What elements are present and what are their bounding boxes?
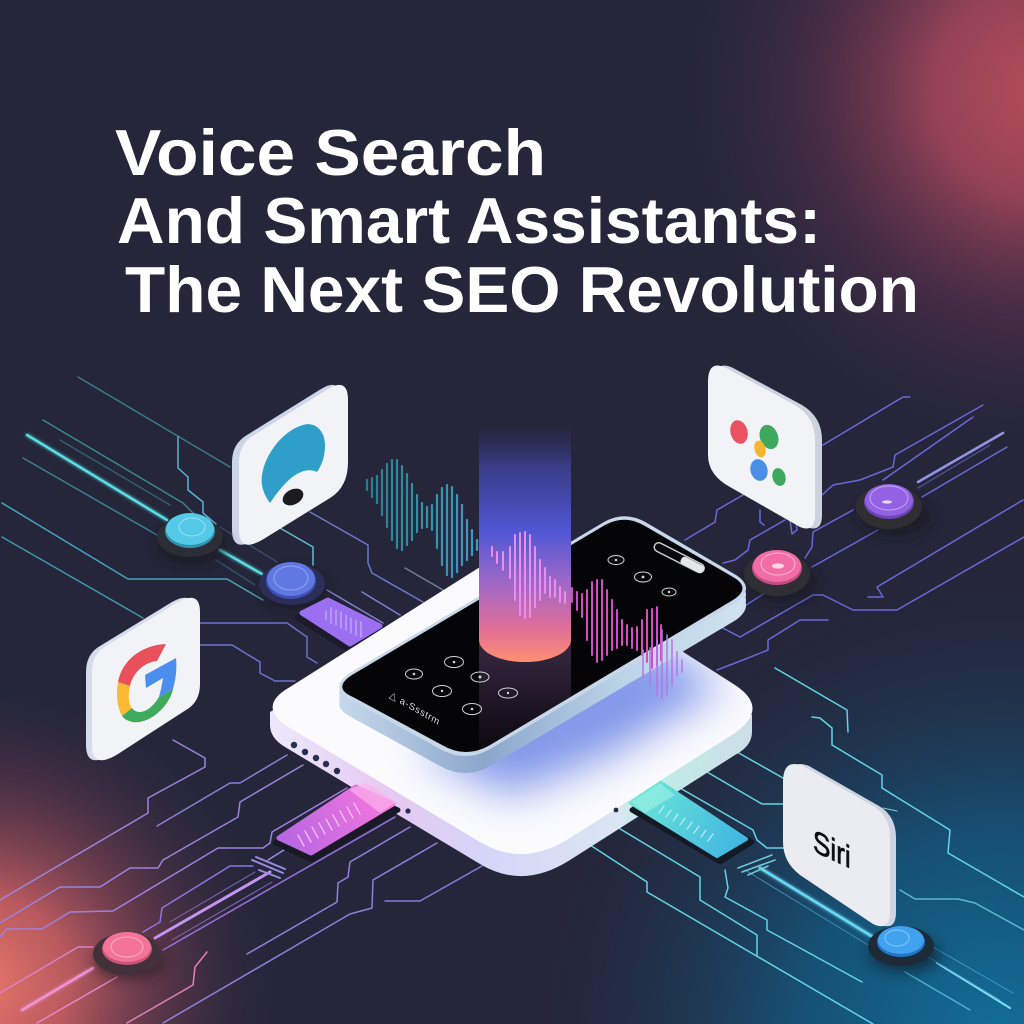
connector: pink chip bbox=[275, 784, 398, 860]
screen icon dots bbox=[413, 559, 670, 710]
card: siri bbox=[783, 764, 896, 926]
icon: google G logo bbox=[117, 644, 176, 722]
pink sound wave bbox=[492, 532, 682, 698]
light beam bbox=[479, 425, 571, 662]
platform side bbox=[270, 700, 752, 876]
icon: blue dome bbox=[262, 424, 325, 503]
circuit lines: lower left bbox=[0, 740, 482, 1023]
circuit lines: upper left bbox=[2, 377, 443, 681]
button: pink lower left bbox=[93, 932, 166, 980]
phone screen bbox=[342, 520, 742, 752]
icon: black eye bbox=[280, 485, 306, 509]
phone bbox=[339, 516, 746, 773]
title bbox=[115, 116, 919, 326]
beam continuation on screen bbox=[479, 640, 571, 760]
button: pink bbox=[744, 550, 818, 602]
icon: wire junction left bbox=[252, 857, 285, 878]
title: Voice Search bbox=[115, 116, 546, 189]
circuit lines: upper right bbox=[685, 397, 1024, 670]
phone glow on platform bbox=[420, 640, 725, 795]
label: Siri: Siri bbox=[813, 824, 851, 876]
icon: wire junction right bbox=[738, 855, 775, 875]
notch pill bbox=[653, 541, 706, 574]
platform side ports bbox=[291, 742, 618, 814]
circuit lines: lower right bbox=[587, 668, 1024, 1024]
button: teal bbox=[156, 513, 228, 565]
card: blue assistant logo bbox=[232, 385, 348, 545]
platform bbox=[270, 556, 752, 876]
button: blue bbox=[259, 562, 328, 610]
card: google G bbox=[86, 598, 200, 760]
title: The Next SEO Revolution bbox=[125, 253, 919, 326]
title: And Smart Assistants: bbox=[117, 184, 821, 257]
teal sound wave bbox=[367, 460, 477, 577]
screen label: △ a-Ssstrm bbox=[388, 690, 441, 728]
button: blue lower right bbox=[868, 926, 941, 973]
connector: purple chip bbox=[298, 600, 382, 650]
icon: assistant dots bbox=[728, 418, 788, 487]
platform top bbox=[273, 556, 752, 854]
screen app icons bbox=[406, 556, 676, 714]
button: purple bbox=[856, 484, 931, 536]
card: google assistant dots bbox=[708, 366, 822, 528]
phone body bbox=[339, 522, 746, 773]
connector: teal chip bbox=[631, 783, 752, 862]
